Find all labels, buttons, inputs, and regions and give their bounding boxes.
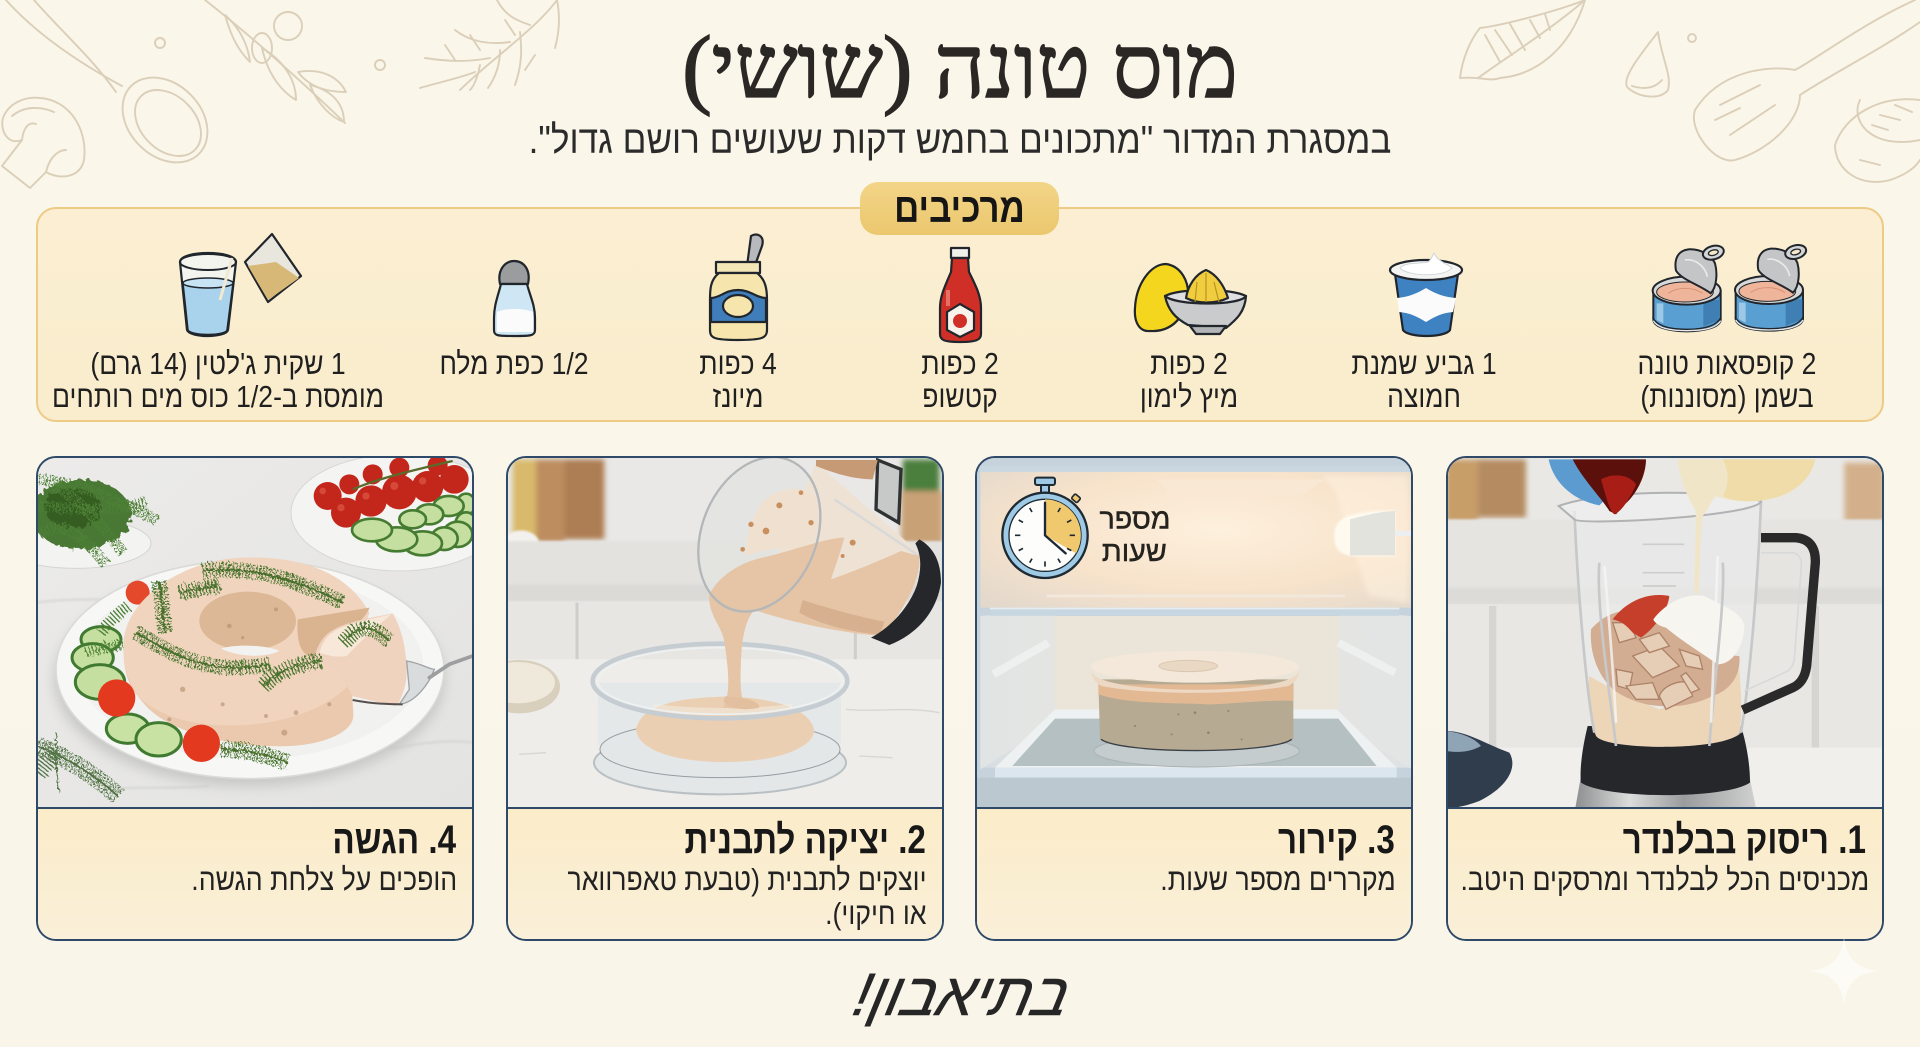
black blender base (871, 539, 941, 645)
handle and hand (876, 460, 901, 523)
contents (1588, 669, 1741, 747)
panel: step 3 cooling (975, 456, 1413, 941)
icon: lemon and juicer (1134, 262, 1248, 336)
cream pitcher pouring (1678, 459, 1815, 593)
label: tuna cans (1638, 347, 1816, 414)
step 2 text: או חיקוי). (826, 896, 927, 931)
liquid and pour stream (709, 538, 919, 709)
dill sprig left (420, 0, 559, 90)
label: ketchup: 2 כפות (921, 347, 999, 381)
timer label (1100, 504, 1170, 568)
icon: ketchup bottle (938, 246, 982, 344)
dill garnish (136, 569, 389, 686)
label: salt: 1/2 כפת מלח (439, 347, 589, 381)
timer label: מספר (1100, 504, 1170, 536)
caption: step 1 (1448, 807, 1882, 939)
spoon right (1694, 0, 1920, 160)
handle (1743, 538, 1815, 710)
upper shelf (990, 608, 1399, 616)
icon: mayonnaise jar (708, 233, 768, 342)
panel: step 1 blending (1446, 456, 1884, 941)
step 1 heading: 1. ריסוק בבלנדר (1623, 818, 1866, 862)
container (1094, 735, 1299, 767)
label: ketchup (921, 347, 999, 414)
ingredient: mayonnaise (699, 233, 777, 414)
leaf right (1460, 0, 1585, 79)
blender lid (1446, 731, 1512, 808)
subtitle: במסגרת המדור "מתכונים בחמש דקות שעושים רושם גדול". (529, 119, 1391, 162)
fridge light (1334, 511, 1395, 556)
icon: sour cream cup (1388, 252, 1464, 338)
label: tuna cans: בשמן (מסוננות) (1640, 380, 1814, 414)
ingredient: gelatin (52, 232, 384, 414)
step 1 text: מכניסים הכל לבלנדר ומרסקים היטב. (1460, 862, 1869, 897)
olive branch (155, 0, 385, 123)
label: ketchup: קטשופ (922, 380, 998, 414)
label: mayonnaise (699, 347, 777, 414)
step 4 heading: 4. הגשה (332, 818, 456, 862)
label: lemon juice: 2 כפות (1150, 347, 1228, 381)
rear shelf edge (1047, 592, 1345, 600)
icon: gelatin packet and water glass (178, 232, 302, 338)
garlic (1626, 32, 1696, 97)
photo: blender with ingredients (1448, 458, 1882, 807)
label: gelatin: מומסת ב-1/2 כוס מים רותחים (52, 380, 384, 414)
icon: salt shaker (492, 260, 536, 338)
step 2 text: יוצקים לתבנית (טבעת טאפרוואר (568, 862, 927, 897)
label: sour cream: חמוצה (1387, 380, 1461, 414)
panel: step 4 serving (36, 456, 474, 941)
label: sour cream: 1 גביע שמנת (1351, 347, 1497, 381)
icon: tuna cans (1652, 244, 1808, 332)
panel: step 2 pouring (506, 456, 944, 941)
caption: step 4 (38, 807, 472, 939)
step 3 heading: 3. קירור (1278, 818, 1395, 862)
background line-art decorations (1, 0, 1920, 189)
step 4 text: הופכים על צלחת הגשה. (191, 862, 457, 897)
label: gelatin (52, 347, 384, 414)
closing text: בתיאבון! (848, 961, 1076, 1028)
side plate (291, 454, 508, 571)
title: מוס טונה (שושי) (682, 19, 1238, 117)
step 2 text (568, 862, 927, 931)
scoop right (1835, 99, 1920, 182)
blender jar glass (676, 439, 842, 630)
ingredient: ketchup (921, 246, 999, 414)
timer label: שעות (1102, 536, 1167, 568)
label: mayonnaise: 4 כפות (699, 347, 777, 381)
ingredient: tuna cans (1638, 244, 1816, 414)
panel: ingredients (36, 207, 1884, 422)
label: mayonnaise: מיונז (713, 380, 763, 414)
label: tuna cans: 2 קופסאות טונה (1638, 347, 1816, 381)
caption: step 3 (977, 807, 1411, 939)
ingredient: lemon juice (1134, 262, 1248, 414)
steel motor base (1575, 776, 1756, 808)
label: lemon juice: מיץ לימון (1140, 380, 1238, 414)
caption: step 2 (508, 807, 942, 939)
small plate (479, 660, 560, 713)
wedge slice (314, 614, 407, 706)
step 3 text: מקררים מספר שעות. (1161, 862, 1396, 897)
label: sour cream (1351, 347, 1497, 414)
heading: ingredients badge: מרכיבים (894, 185, 1025, 231)
bottom garnish (106, 714, 181, 756)
jar streaks (1574, 501, 1761, 746)
heading: ingredients badge (860, 182, 1059, 235)
spoon left (6, 0, 224, 179)
jar (1559, 493, 1761, 745)
batter in mold (636, 697, 814, 762)
main plate (56, 560, 444, 779)
icon: stopwatch (1002, 478, 1088, 578)
garnish under the ring (72, 627, 125, 699)
photo: pouring into mold (508, 458, 942, 807)
icon: sparkle watermark (1812, 938, 1876, 1003)
mushroom (2, 98, 85, 188)
ingredient: salt (439, 260, 589, 381)
jar rim (1559, 493, 1761, 521)
label: lemon juice (1140, 347, 1238, 414)
glass mold base (594, 731, 846, 794)
label: gelatin: 1 שקית ג'לטין (14 גרם) (90, 347, 346, 381)
tuna can pouring (1549, 459, 1646, 505)
lower compartment (980, 616, 1412, 768)
mousse ring (123, 558, 369, 746)
dill plate (1, 518, 151, 568)
jar rim (676, 439, 842, 630)
step 2 heading: 2. יציקה לתבנית (685, 818, 926, 862)
photo: fridge interior with timer (977, 458, 1411, 807)
lower shelf (995, 709, 1397, 768)
photo: tuna mousse ring on plate (38, 458, 472, 807)
server (399, 661, 434, 704)
ingredient: sour cream (1351, 252, 1497, 414)
